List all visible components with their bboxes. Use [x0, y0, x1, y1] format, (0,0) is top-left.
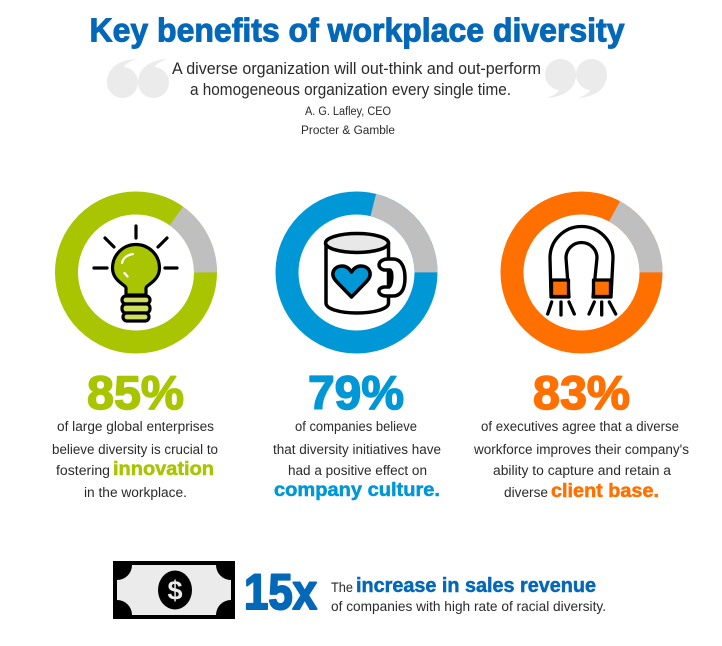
description: company culture: company culture. [274, 480, 440, 501]
description: innovation: in the workplace. [84, 485, 187, 500]
quote text [172, 60, 541, 99]
quote attribution: Procter & Gamble [301, 125, 395, 137]
callout text: increase in sales revenue [356, 575, 596, 597]
panel: client base [473, 178, 689, 502]
description: innovation [52, 419, 218, 500]
callout: sales revenue [113, 561, 606, 620]
description: client base: ability to capture and retain a [493, 463, 672, 478]
quote attribution [301, 106, 395, 137]
donut chart: 85% [39, 175, 233, 370]
description: innovation: innovation [113, 459, 214, 480]
callout text [331, 575, 606, 614]
icon: dollar bill [113, 561, 235, 619]
description: company culture: of companies believe [295, 419, 417, 434]
quote text: A diverse organization will out-think and out-perform [172, 60, 541, 78]
description: company culture: had a positive effect on [288, 463, 427, 478]
description: client base [473, 419, 689, 502]
quote block [107, 59, 607, 137]
donut chart: 79% [272, 188, 441, 357]
donut chart: 83% [487, 178, 676, 367]
description: innovation: of large global enterprises [57, 419, 214, 434]
description: client base: of executives agree that a diverse [481, 419, 679, 434]
title: Key benefits of workplace diversity [90, 12, 625, 48]
quote attribution: A. G. Lafley, CEO [305, 106, 391, 118]
stat: 79%: 79% [308, 366, 404, 419]
stat: 85%: 85% [87, 366, 184, 419]
quote text: a homogeneous organization every single time. [190, 81, 511, 99]
icon: opening quote mark [107, 59, 169, 98]
stat: 15x: 15x [244, 564, 317, 620]
description: client base: diverse [504, 485, 548, 500]
icon: magnet [548, 226, 616, 315]
description: innovation: believe diversity is crucial to [52, 442, 218, 457]
description: client base: client base. [551, 481, 659, 502]
panel: company culture [272, 188, 441, 501]
icon: dollar bill: $ [167, 576, 183, 606]
callout text: of companies with high rate of racial diversity. [331, 598, 606, 614]
icon: mug with heart [326, 234, 405, 313]
stat: 83%: 83% [533, 366, 630, 419]
description: company culture: that diversity initiatives have [273, 442, 441, 457]
icon: closing quote mark [545, 59, 607, 98]
panel: innovation [39, 175, 233, 500]
callout text: The [331, 579, 353, 595]
description: innovation: fostering [56, 463, 110, 478]
description: company culture [273, 419, 441, 501]
description: client base: workforce improves their company's [473, 442, 689, 457]
icon: light bulb [94, 226, 177, 321]
